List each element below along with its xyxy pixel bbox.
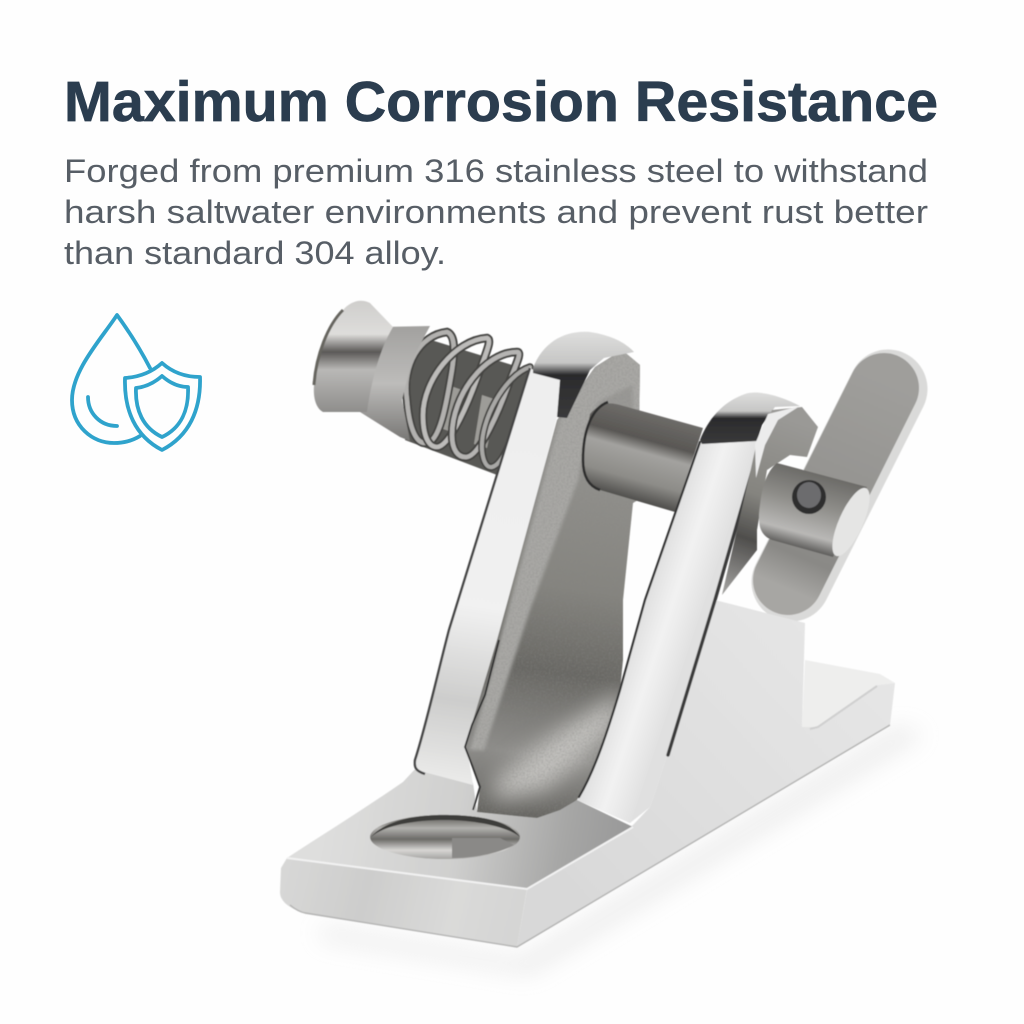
right arm top cap	[700, 393, 800, 444]
spring shaft	[405, 335, 535, 478]
spring shaft highlights	[440, 385, 497, 448]
toggle paddle	[788, 388, 888, 582]
base edge highlight	[287, 827, 633, 889]
title: Maximum Corrosion Resistance	[64, 70, 938, 134]
base side wall	[517, 600, 895, 947]
icon: water drop with shield	[72, 315, 200, 450]
description text: Forged from premium 316 stainless steel to withstand	[64, 153, 928, 189]
knob	[314, 301, 393, 412]
spring coils	[406, 332, 530, 467]
description text	[64, 153, 928, 271]
ground shadow	[320, 725, 925, 975]
rear base wedge	[802, 660, 895, 727]
knob rim	[314, 310, 343, 385]
base plate front face	[280, 858, 527, 947]
description text: than standard 304 alloy.	[64, 235, 446, 271]
infographic canvas	[64, 80, 936, 974]
base bottom edge	[290, 725, 890, 947]
mounting hole	[370, 815, 520, 859]
pin end with cross pin	[759, 463, 877, 561]
right collar	[722, 407, 818, 595]
right arm edge lines	[579, 442, 752, 797]
product: stainless steel deck hinge	[280, 301, 925, 975]
left arm crack edge	[465, 640, 499, 810]
neck of knob	[360, 326, 430, 441]
right collar highlight	[755, 406, 800, 478]
main pin	[583, 403, 703, 512]
right arm polished face	[577, 440, 757, 823]
wedge ridge line	[810, 686, 877, 729]
left arm rough inner face	[465, 353, 640, 819]
pin socket shadow	[583, 402, 608, 490]
left arm dark edge	[415, 368, 530, 774]
left arm polished outer face	[413, 367, 560, 785]
description text: harsh saltwater environments and prevent rust better	[64, 194, 928, 230]
left arm top cap	[533, 332, 634, 418]
base plate top face	[287, 767, 633, 890]
